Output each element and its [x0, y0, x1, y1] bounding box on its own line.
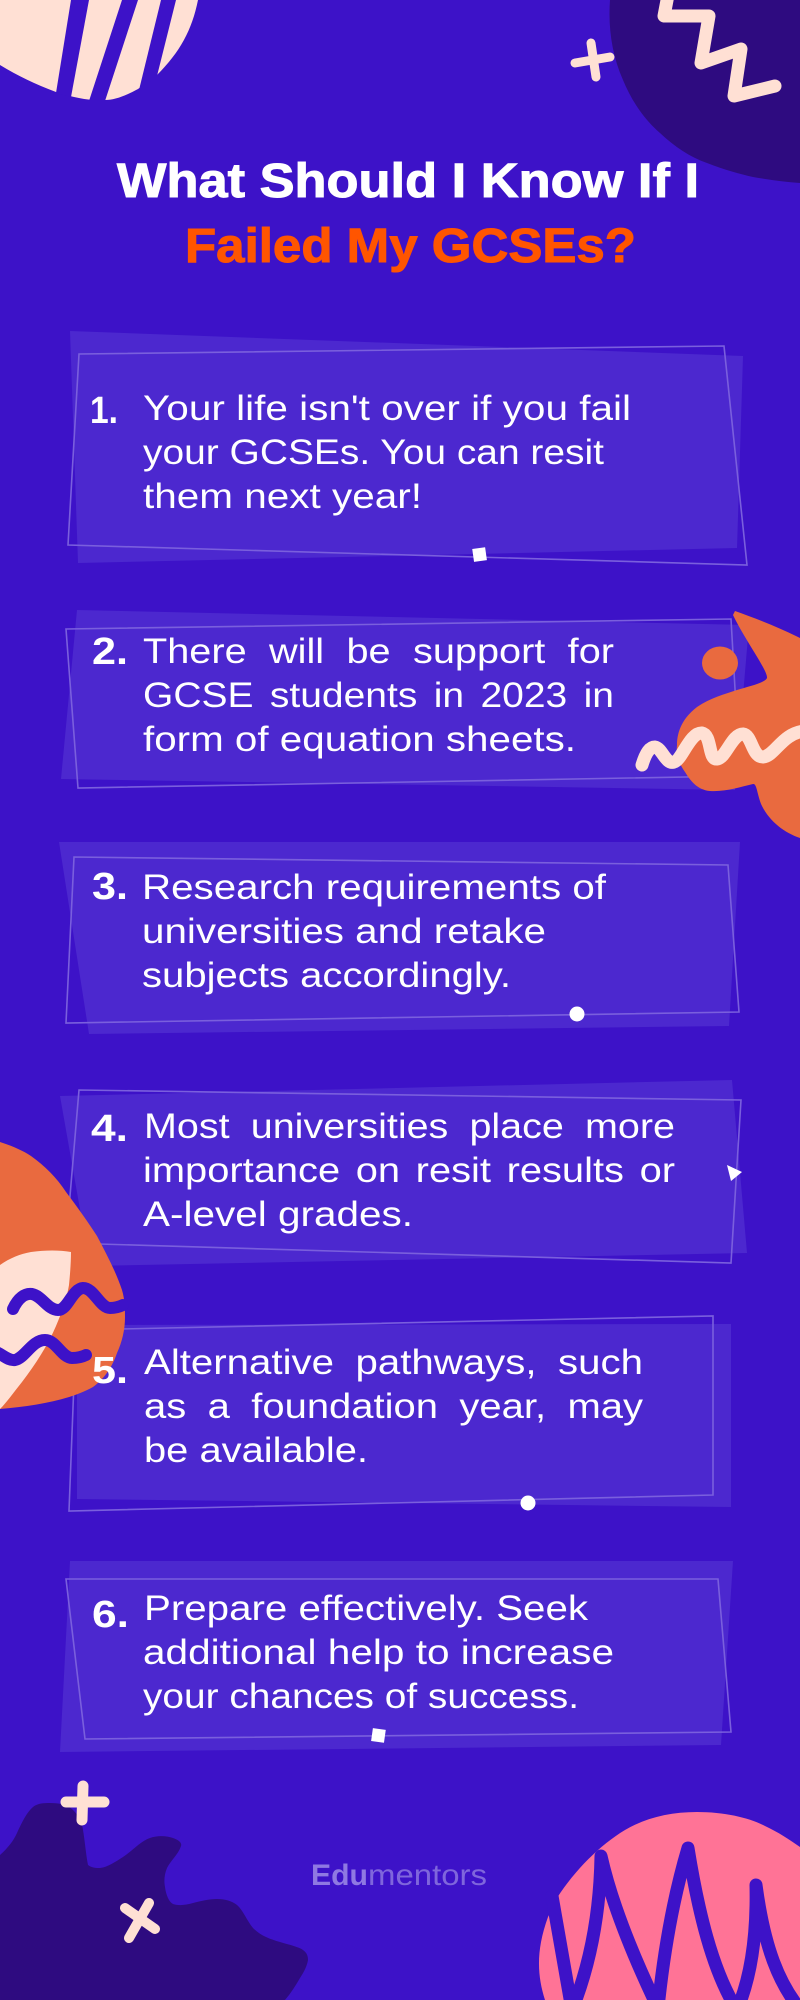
- number 5: 5.: [92, 1350, 128, 1392]
- marker: square: [472, 547, 487, 562]
- marker: dot: [520, 1496, 536, 1510]
- decoration: right orange blob with wave: [642, 611, 800, 838]
- circle: [702, 646, 738, 680]
- logo: Edumentors: mentors: [368, 1859, 487, 1892]
- panel: tip 4: Most universities place more: [144, 1107, 675, 1146]
- panel: tip 2: form of equation sheets.: [143, 720, 576, 759]
- panel: tip 5: [69, 1316, 731, 1511]
- panel: tip 3: subjects accordingly.: [142, 956, 511, 995]
- marker: triangle: [727, 1165, 742, 1181]
- panel: tip 4: 4.: [91, 1108, 128, 1150]
- wave: [642, 731, 800, 765]
- panel: tip 2: 2.: [92, 631, 128, 673]
- marker: dot: [570, 1006, 584, 1022]
- panel: tip 6: Prepare effectively. Seek: [144, 1589, 589, 1628]
- panel: tip 3: universities and retake: [142, 912, 546, 951]
- panel: tip 2: GCSE students in 2023 in: [143, 676, 614, 715]
- decoration: top-left striped blob: [0, 0, 198, 101]
- panel: tip 1: Your life isn't over if you fail: [143, 389, 631, 428]
- panel: tip 1: [68, 331, 747, 565]
- panel: tip 5: Alternative pathways, such: [144, 1343, 643, 1382]
- panel: tip 5: as a foundation year, may: [144, 1387, 644, 1426]
- title: What Should I Know If I: [117, 155, 699, 208]
- title: Failed My GCSEs?: [185, 220, 636, 273]
- panel: tip 3: Research requirements of: [142, 868, 606, 907]
- panel: tip 2: [61, 610, 749, 790]
- panel: tip 4: A-level grades.: [143, 1195, 413, 1234]
- title: [117, 155, 699, 273]
- icon: cross bottom left: [125, 1903, 155, 1938]
- panel: tip 6: [60, 1561, 733, 1752]
- panel: tip 3: 3.: [92, 866, 128, 908]
- wave 1: [13, 1288, 123, 1310]
- decoration: bottom-right pink blob with zigzag: [539, 1812, 800, 2000]
- panel: tip 6: your chances of success.: [143, 1677, 579, 1716]
- logo: Edumentors: Edu: [311, 1859, 368, 1892]
- decoration: left orange blob with waves: [0, 1142, 125, 1409]
- panel: tip 2: There will be support for: [143, 632, 614, 671]
- logo: Edumentors: [311, 1859, 487, 1892]
- decoration: top-right dark blob with zigzag: [610, 0, 800, 183]
- wave 2: [0, 1340, 86, 1360]
- panel: tip 6: additional help to increase: [143, 1633, 614, 1672]
- panel: tip 4: importance on resit results or: [143, 1151, 675, 1190]
- icon: plus bottom left: [66, 1786, 104, 1820]
- panel: tip 1: them next year!: [143, 477, 422, 516]
- panel: tip 1: your GCSEs. You can resit: [143, 433, 604, 472]
- icon: plus top right: [575, 43, 610, 77]
- decoration: bottom-left dark blob: [0, 1803, 308, 2000]
- panel: tip 5: be available.: [144, 1431, 368, 1470]
- panel: tip 6: 6.: [92, 1594, 129, 1636]
- panel: tip 3: [59, 842, 740, 1034]
- panel: tip 1: 1.: [90, 390, 118, 432]
- icon: zigzag: [664, 0, 775, 96]
- marker: square: [371, 1728, 386, 1743]
- panel: tip 4: [60, 1080, 747, 1266]
